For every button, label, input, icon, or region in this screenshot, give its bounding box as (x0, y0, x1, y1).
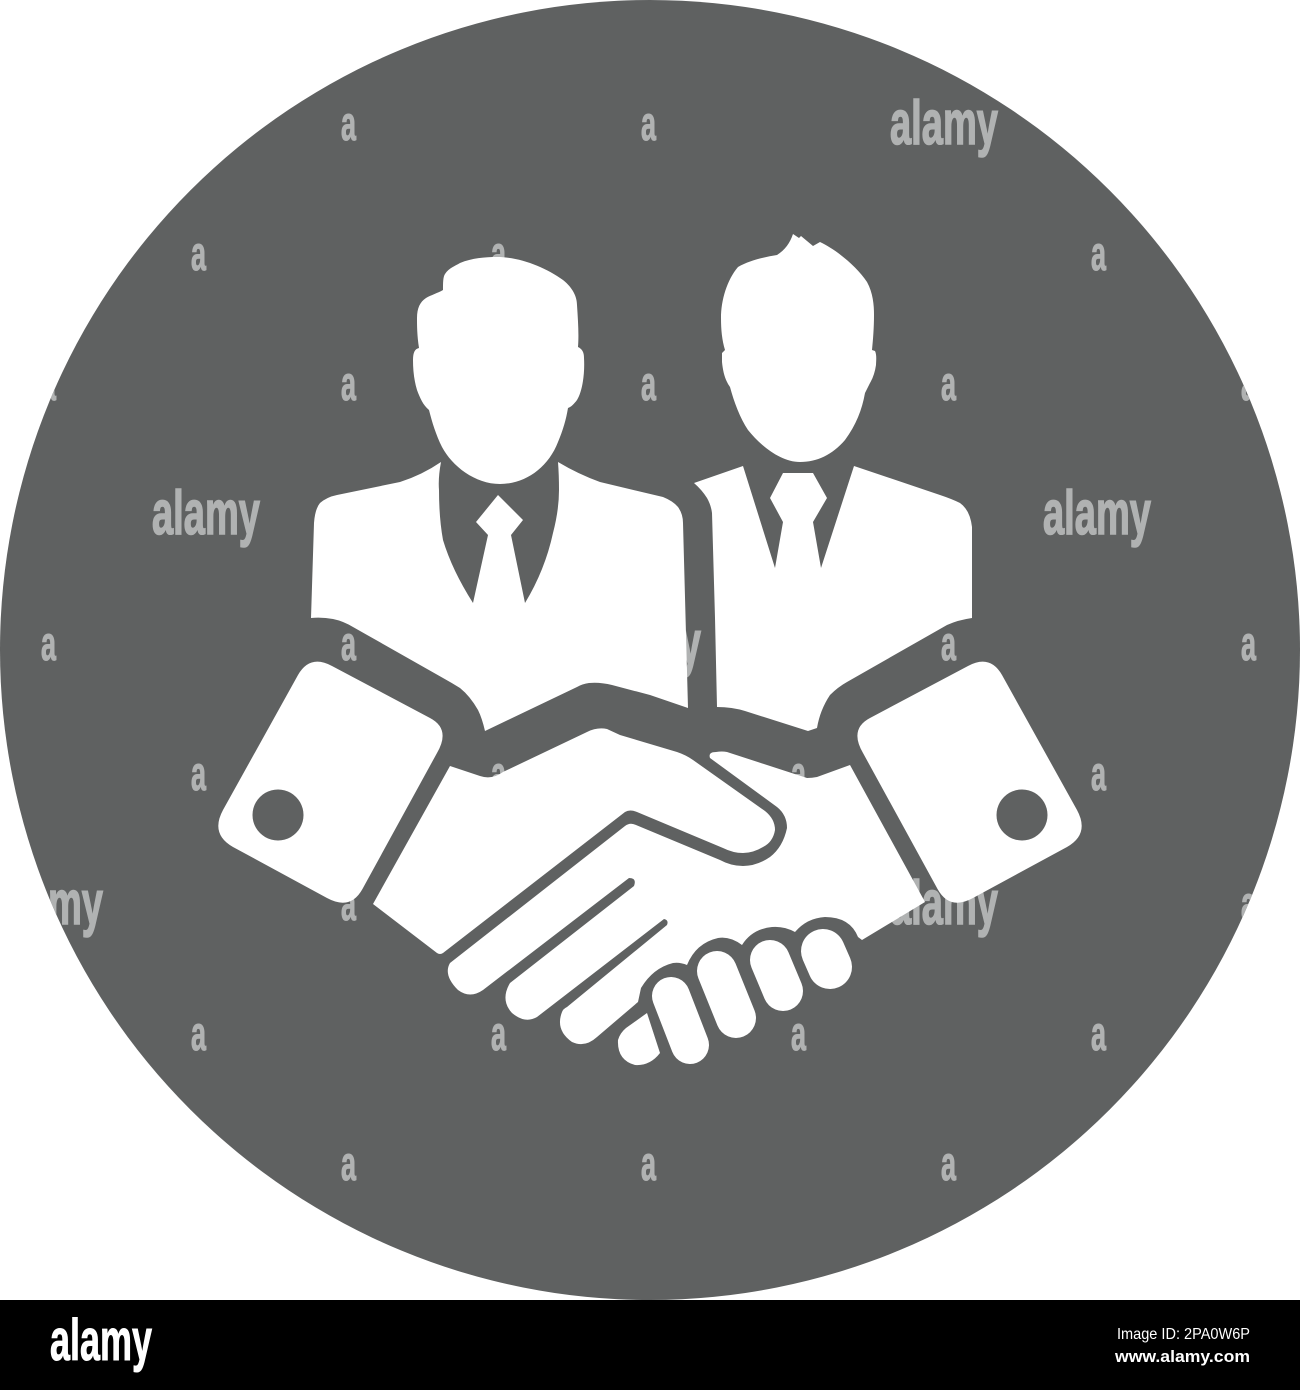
watermark pattern: alamy (152, 479, 260, 548)
icon: right hand with fingers (448, 752, 925, 1044)
watermark pattern: a (641, 98, 656, 151)
watermark pattern: a (941, 358, 956, 411)
watermark pattern: a (1241, 618, 1256, 671)
watermark pattern: a (191, 228, 206, 281)
watermark pattern: a (341, 618, 356, 671)
icon: right hand fingers (671, 951, 830, 1045)
footer bar (0, 1300, 1300, 1390)
watermark pattern: a (641, 1138, 656, 1191)
icon: left hand with thumb (373, 728, 775, 954)
watermark pattern: a (341, 358, 356, 411)
watermark pattern: alamy (890, 89, 998, 158)
watermark pattern: a (41, 358, 56, 411)
watermark pattern: a (491, 228, 506, 281)
watermark pattern: a (341, 878, 356, 931)
watermark pattern: alamy (0, 869, 103, 938)
watermark pattern: a (491, 1008, 506, 1061)
watermark pattern: a (191, 1008, 206, 1061)
watermark pattern: a (41, 618, 56, 671)
watermark pattern: a (1241, 358, 1256, 411)
watermark pattern: a (341, 98, 356, 151)
right person suit and tie (694, 466, 972, 731)
footer logo: alamy (50, 1308, 152, 1373)
watermark pattern: a (641, 878, 656, 931)
watermark pattern: a (1091, 1008, 1106, 1061)
image id: Image ID: 2PA0W6P (1117, 1326, 1250, 1343)
right person head (721, 234, 876, 462)
watermark pattern: a (941, 1138, 956, 1191)
icon: left person (311, 257, 688, 731)
watermark pattern: a (341, 1138, 356, 1191)
left person head (413, 257, 584, 484)
watermark pattern: a (641, 358, 656, 411)
watermark pattern (0, 89, 1256, 1191)
icon: business people shaking hands (218, 234, 1082, 1065)
icon: small fingertip (618, 1013, 660, 1065)
watermark pattern: a (791, 1008, 806, 1061)
left person suit and tie (311, 462, 688, 731)
watermark pattern: alamy (1043, 479, 1151, 548)
icon: right shirt cuff (857, 662, 1082, 903)
watermark pattern: a (791, 748, 806, 801)
icon: left shirt cuff (218, 662, 443, 903)
watermark pattern: alamy (593, 609, 701, 678)
watermark pattern: a (1241, 878, 1256, 931)
website: www.alamy.com (1114, 1347, 1250, 1366)
watermark pattern: a (941, 618, 956, 671)
watermark pattern: alamy (890, 869, 998, 938)
watermark pattern: a (1091, 748, 1106, 801)
watermark pattern: a (1091, 228, 1106, 281)
icon: right person (694, 234, 972, 731)
watermark pattern: a (191, 748, 206, 801)
watermark pattern: a (491, 748, 506, 801)
